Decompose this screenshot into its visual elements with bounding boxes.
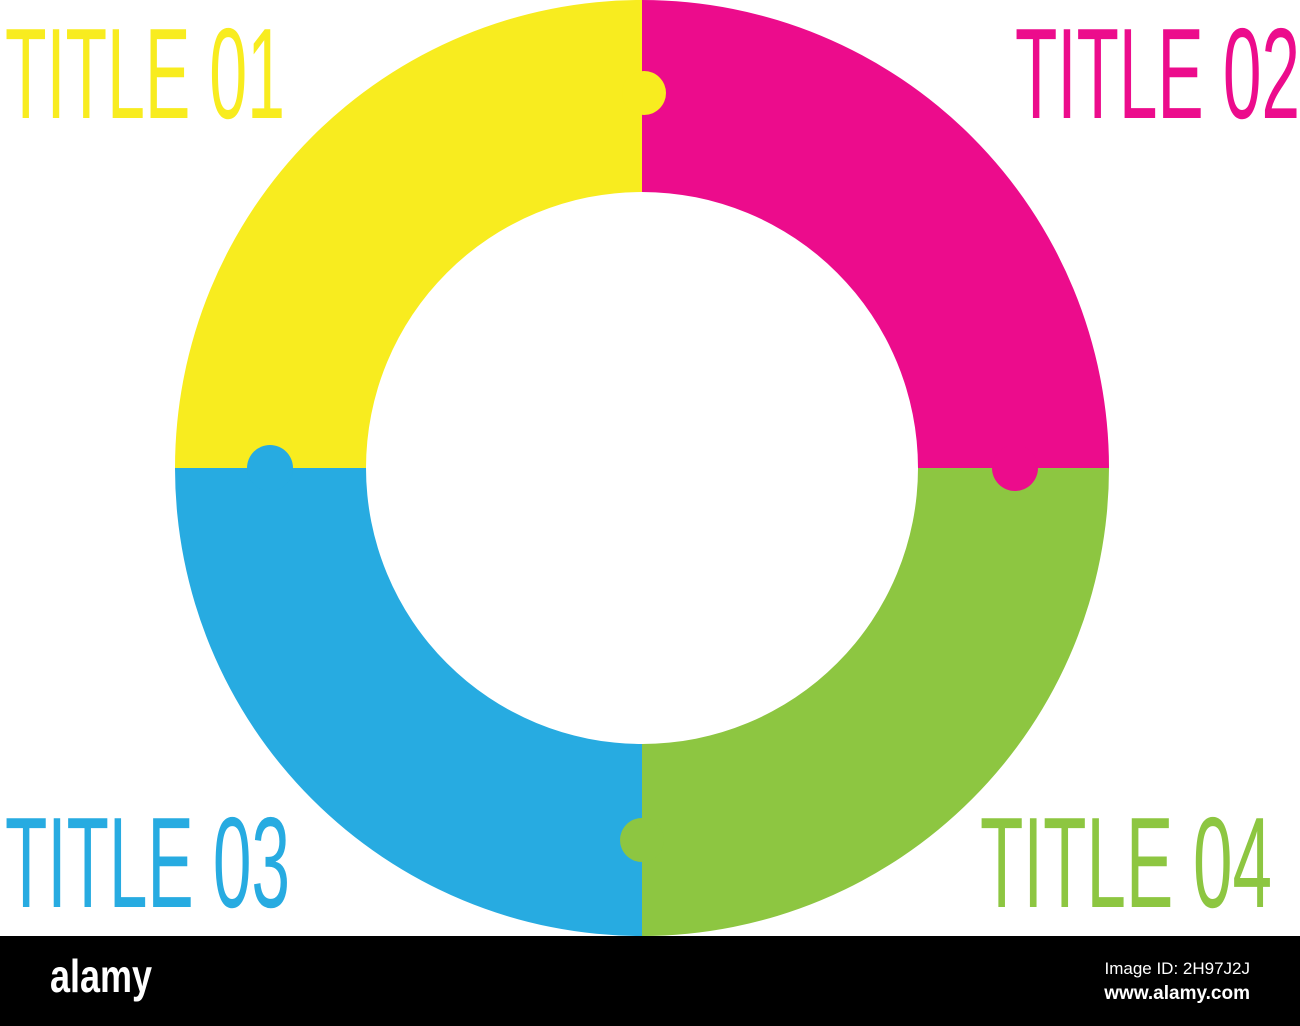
- tab: pink: [992, 445, 1038, 491]
- segment: pink: [642, 0, 1109, 468]
- segment: yellow: [175, 0, 642, 468]
- footer logo: alamy: [50, 950, 152, 1002]
- tab: green: [620, 818, 664, 862]
- ring chart: [175, 0, 1109, 936]
- segment: blue: [175, 468, 642, 936]
- title 01: TITLE 01: [5, 2, 285, 146]
- footer url: www.alamy.com: [1103, 983, 1250, 1004]
- segment: green: [642, 468, 1109, 936]
- footer image id: Image ID: 2H97J2J: [1104, 959, 1250, 978]
- title 03: TITLE 03: [5, 791, 290, 935]
- footer bar: [0, 936, 1300, 1026]
- tab: blue: [247, 445, 293, 491]
- tab: yellow: [622, 71, 666, 115]
